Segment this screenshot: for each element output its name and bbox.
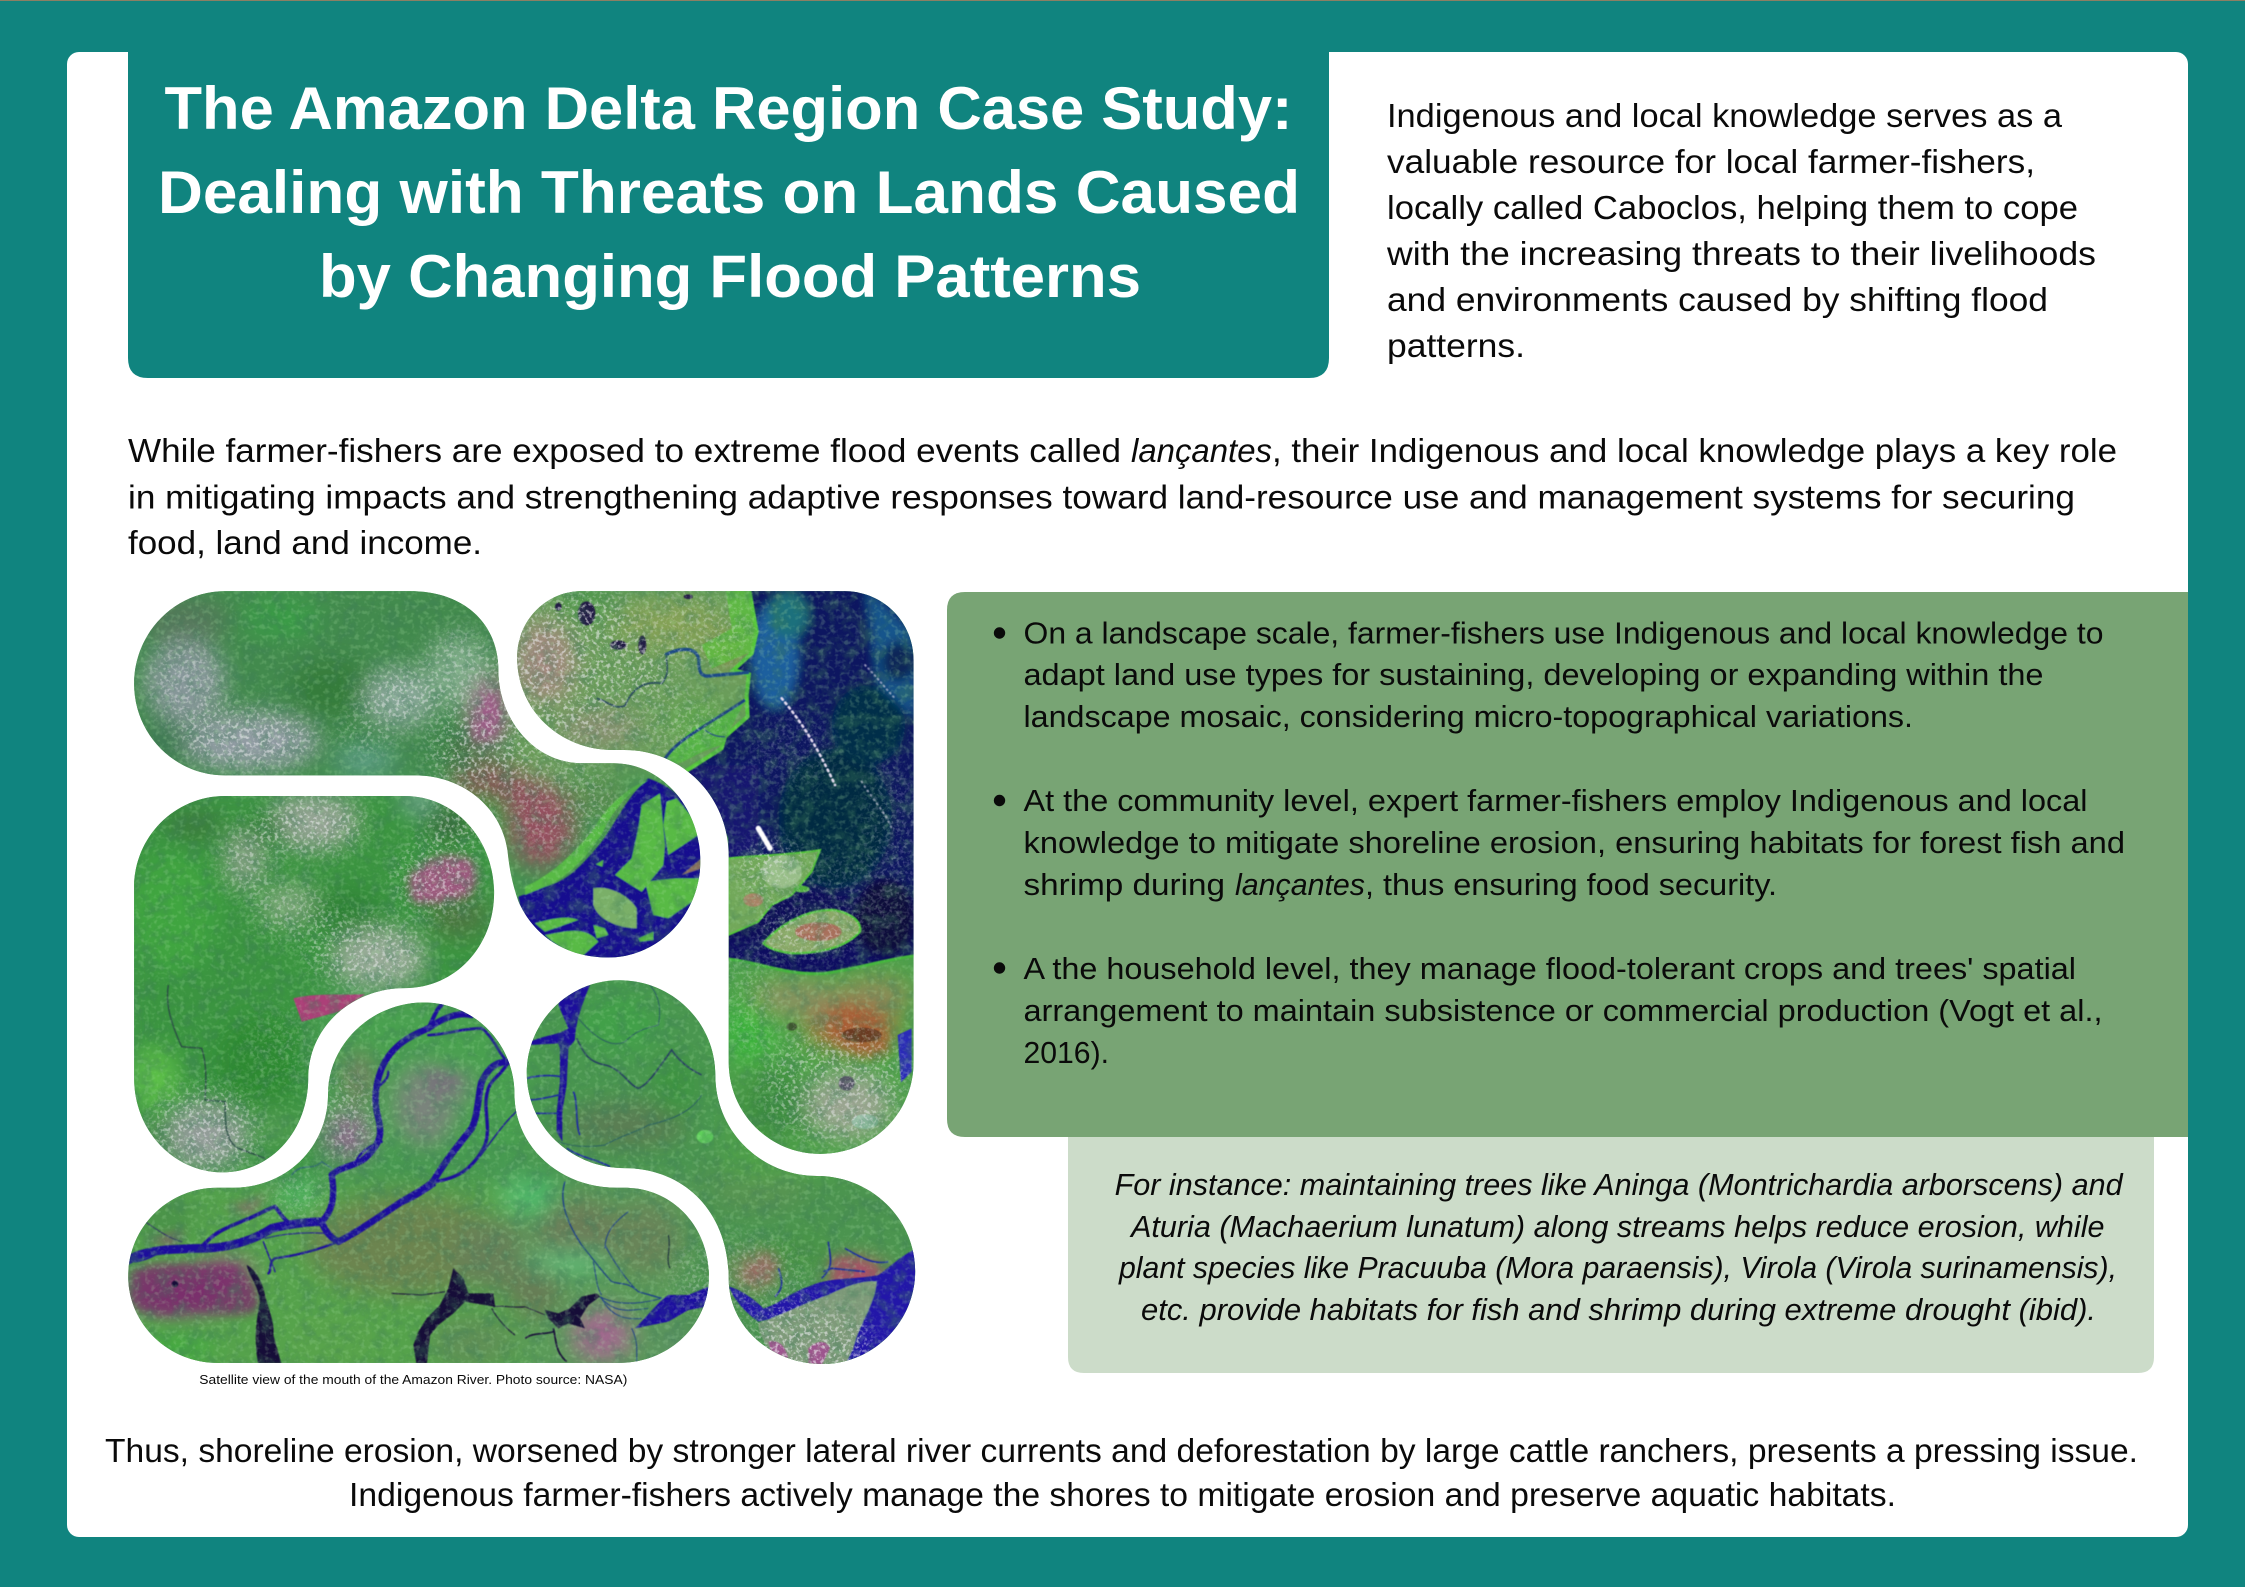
top edge line	[0, 0, 2245, 1]
bullet: household level	[994, 952, 2102, 1070]
bullet: household level: A the household level, they manage flood-tolerant crops and trees' spatial	[1024, 952, 2076, 986]
text block: examples: For instance: maintaining trees like Aninga (Montrichardia arborscens) and	[1115, 1168, 2124, 1202]
text block: lançantes paragraph: food, land and income.	[128, 524, 482, 561]
panel: adaptive responses	[947, 592, 2188, 1137]
top-left piece	[125, 585, 508, 778]
panel: title banner	[128, 52, 1329, 378]
bullet: community level: At the community level, expert farmer-fishers employ Indigenous and local	[1024, 784, 2088, 818]
text block: lançantes paragraph: While farmer-fishers are exposed to extreme flood events called	[128, 432, 1121, 469]
bottom piece	[325, 998, 532, 1152]
text block: examples: plant species like Pracuuba (Mora paraensis), Virola (Virola surinamensis),	[1118, 1251, 2117, 1285]
text block: conclusion: Indigenous farmer-fishers actively manage the shores to mitigate erosion and preserve aquatic habitats.	[349, 1476, 1896, 1513]
bullet: landscape scale: On a landscape scale, farmer-fishers use Indigenous and local knowledge to	[1024, 616, 2104, 650]
text block: conclusion	[105, 1432, 2138, 1513]
bullet: community level	[994, 784, 2125, 902]
bullet: community level: shrimp during	[1024, 868, 1225, 902]
caption: Satellite view of the mouth of the Amazon River. Photo source: NASA)	[199, 1372, 627, 1387]
text block: introduction: valuable resource for local farmer-fishers,	[1387, 143, 2035, 180]
Pará river estuary	[729, 1248, 917, 1365]
text block: introduction: with the increasing threats to their livelihoods	[1386, 235, 2096, 272]
left piece lower	[132, 985, 312, 1172]
delta circle	[518, 778, 705, 962]
regional land details	[132, 685, 889, 1315]
bullet: landscape scale: adapt land use types for sustaining, developing or expanding within the	[1024, 658, 2044, 692]
bottom right corner	[725, 1224, 892, 1290]
bullet: household level: 2016).	[1024, 1036, 1109, 1070]
text block: examples	[1115, 1168, 2124, 1327]
bullet: community level: , thus ensuring food security.	[1365, 868, 1777, 902]
green speckle	[125, 585, 925, 1385]
text block: lançantes paragraph: in mitigating impacts and strengthening adaptive responses toward land-resource use and management systems for securing	[128, 478, 2075, 516]
centre purple area	[472, 678, 505, 745]
bottom-right piece	[525, 982, 725, 1172]
Atlantic Ocean	[688, 591, 914, 973]
black water rivers	[167, 985, 525, 1365]
left piece	[125, 793, 498, 987]
text block: introduction: and environments caused by shifting flood	[1387, 281, 2048, 318]
text block: lançantes paragraph	[128, 432, 2117, 561]
Marajó lobe	[728, 850, 820, 935]
title: by Changing Flood Patterns	[319, 243, 1141, 310]
bullet: community level: knowledge to mitigate shoreline erosion, ensuring habitats for forest fish and	[1024, 826, 2125, 860]
land colour fields	[125, 585, 925, 1392]
text block: conclusion: Thus, shoreline erosion, worsened by stronger lateral river currents and deforestation by large cattle ranchers, presents a pressing issue.	[105, 1432, 2138, 1469]
title	[158, 75, 1300, 310]
text block: introduction: Indigenous and local knowledge serves as a	[1387, 97, 2063, 134]
text block: lançantes paragraph: , their Indigenous and local knowledge plays a key role	[1272, 432, 2117, 469]
bullet: landscape scale	[994, 616, 2103, 734]
top-right coast and islands	[555, 585, 925, 974]
lower-right land	[725, 952, 925, 1178]
bottom piece, right half	[522, 1178, 708, 1385]
title: Dealing with Threats on Lands Caused	[158, 159, 1300, 226]
bullet: household level: arrangement to maintain subsistence or commercial production (Vogt et al.,	[1024, 994, 2102, 1028]
top-right land	[512, 585, 765, 772]
bullet: community level: lançantes	[1235, 868, 1365, 902]
text block: introduction: locally called Caboclos, helping them to cope	[1387, 189, 2078, 226]
land edge above lower land	[728, 954, 925, 974]
title: The Amazon Delta Region Case Study:	[164, 75, 1292, 142]
text block: introduction: patterns.	[1387, 327, 1525, 364]
cloud speckle	[125, 585, 925, 1385]
panel: examples callout	[1068, 1130, 2154, 1373]
bullet: landscape scale: landscape mosaic, considering micro-topographical variations.	[1024, 700, 1913, 734]
mottled forest texture	[125, 585, 925, 1385]
text block: examples: etc. provide habitats for fish and shrimp during extreme drought (ibid).	[1141, 1293, 2096, 1327]
Q4 rivers	[525, 985, 917, 1365]
satellite image: mouth of the Amazon River	[125, 568, 942, 1392]
Mexiana island	[763, 910, 860, 953]
text block: lançantes paragraph: lançantes	[1131, 432, 1272, 469]
text block: introduction	[1386, 97, 2096, 364]
sea cloud streaks	[758, 665, 895, 848]
text block: examples: Aturia (Machaerium lunatum) along streams helps reduce erosion, while	[1129, 1210, 2104, 1244]
Q3 main Amazon channels	[128, 1005, 525, 1273]
